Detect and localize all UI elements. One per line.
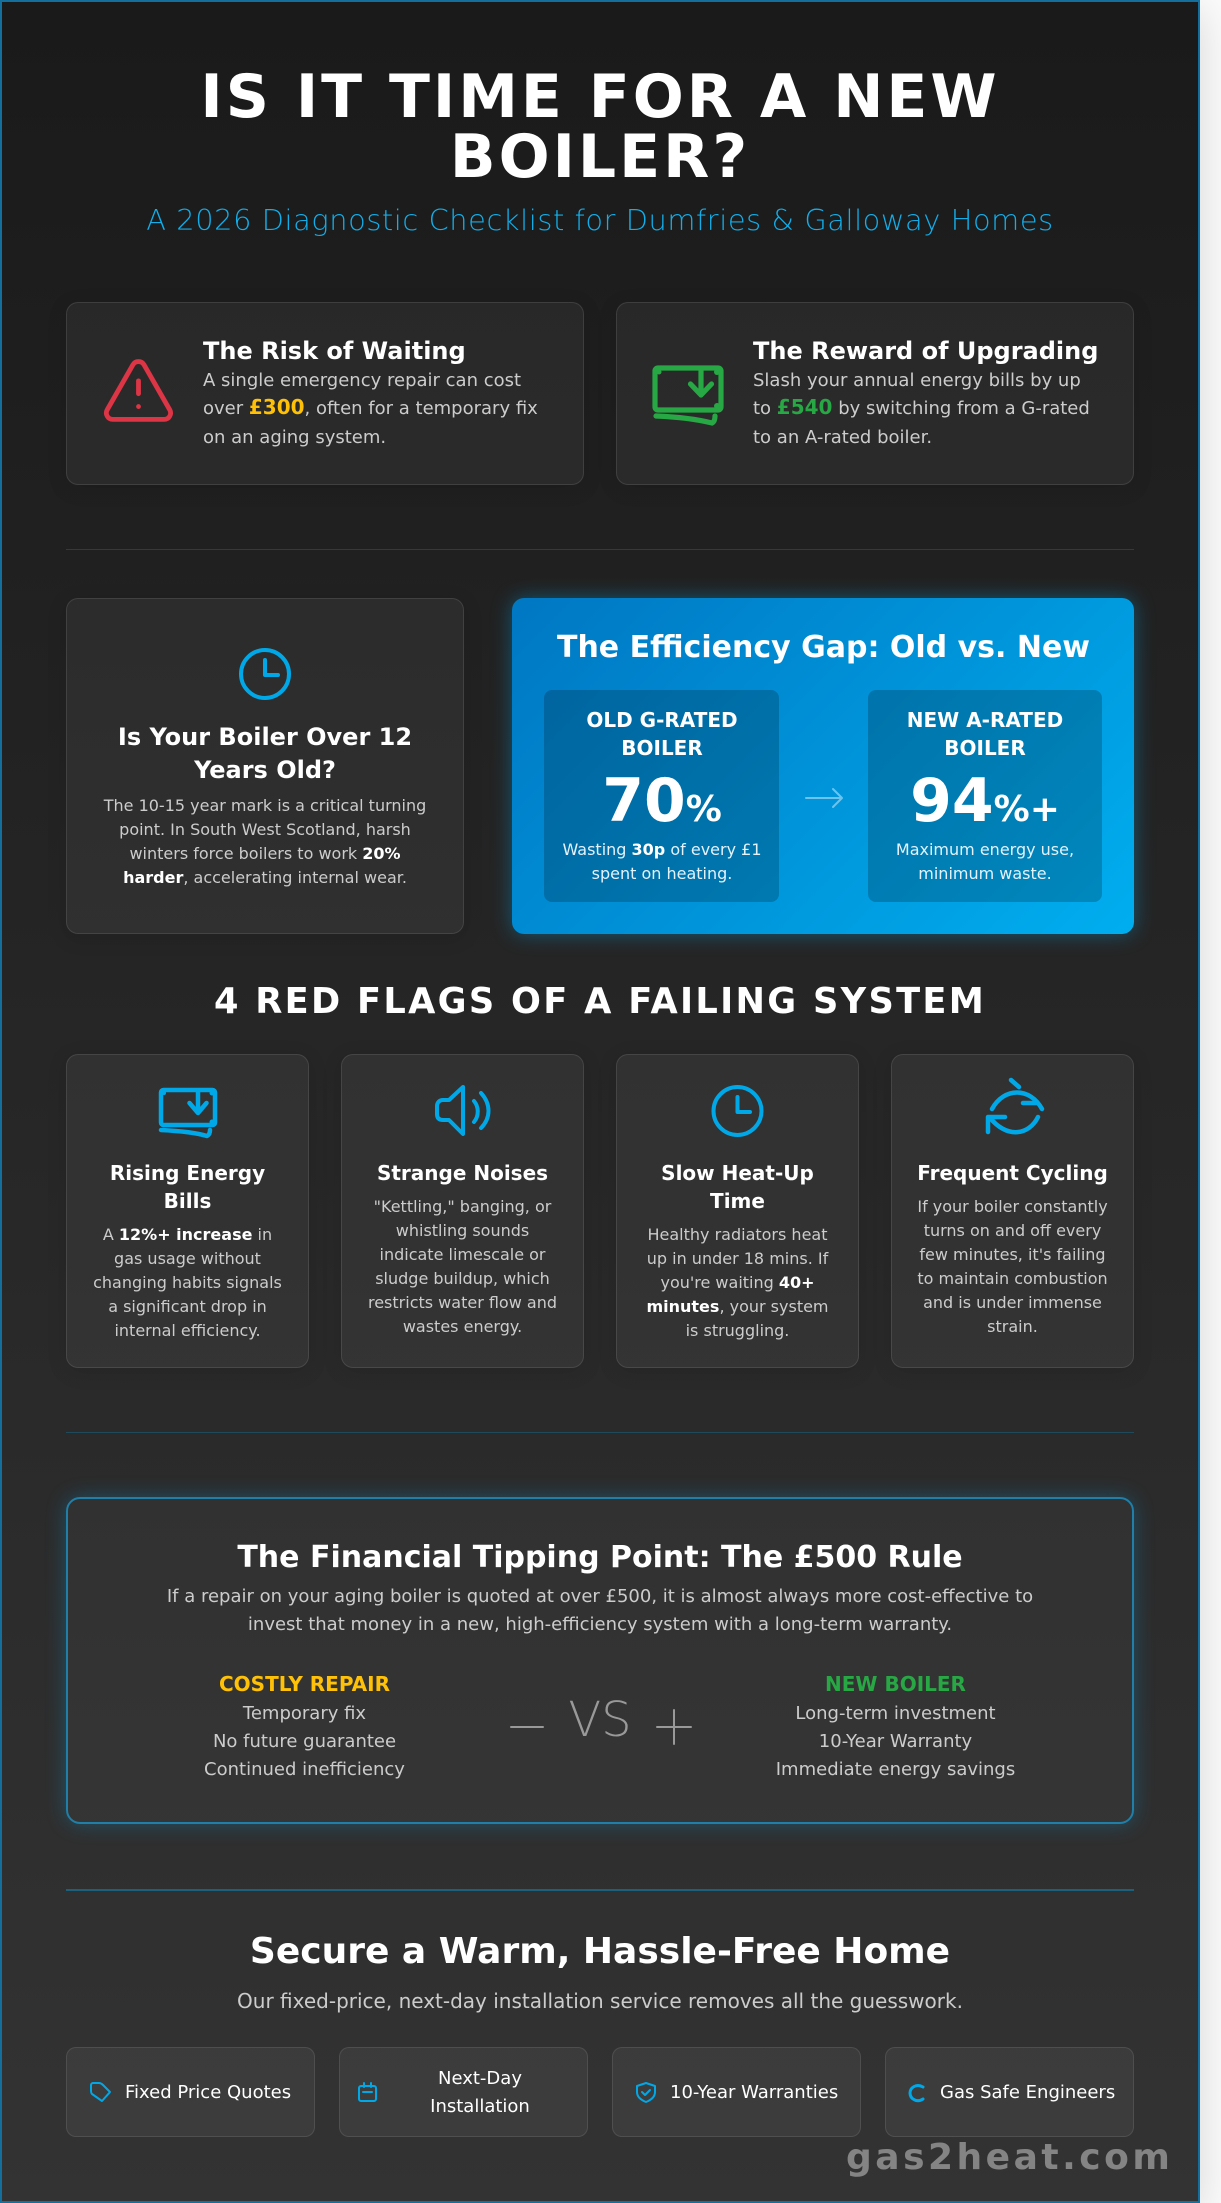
- label: new boiler: [907, 708, 1063, 760]
- label: old boiler: BOILER: [621, 736, 703, 760]
- heading: slow heat-up: Slow Heat-Up: [661, 1161, 814, 1185]
- text: rising energy bills: [93, 1225, 282, 1340]
- text: financial tipping point: [167, 1586, 1033, 1635]
- text: frequent cycling: [917, 1197, 1108, 1336]
- heading: risk of waiting: The Risk of Waiting: [203, 336, 466, 364]
- heading: slow heat-up: Time: [710, 1189, 765, 1213]
- heading: call to action: Secure a Warm, Hassle-Free Home: [250, 1931, 950, 1972]
- text: reward of upgrading: to £540 by switching from a G-rated: [753, 395, 1090, 419]
- text: rising energy bills: a significant drop in: [108, 1297, 267, 1316]
- column: costly repair: Continued inefficiency: [204, 1759, 405, 1780]
- text: rising energy bills: gas usage without: [114, 1249, 261, 1268]
- heading: slow heat-up: [661, 1161, 814, 1213]
- column: costly repair: [204, 1672, 405, 1780]
- heading: red flags: 4 RED FLAGS OF A FAILING SYSTEM: [214, 981, 986, 1022]
- title: BOILER?: [450, 122, 750, 192]
- text: strange noises: indicate limescale or: [380, 1245, 546, 1264]
- panel: new boiler: [868, 690, 1102, 902]
- text: new boiler: [896, 840, 1074, 883]
- icon: price tag: [90, 2082, 111, 2102]
- column: new boiler: NEW BOILER: [825, 1672, 966, 1696]
- heading: boiler age: [118, 723, 412, 784]
- text: boiler age: winters force boilers to work 20%: [129, 844, 401, 863]
- text: rising energy bills: internal efficiency.: [114, 1321, 261, 1340]
- text: new boiler: minimum waste.: [918, 864, 1052, 883]
- text: boiler age: The 10-15 year mark is a critical turning: [104, 796, 426, 815]
- text: slow heat-up: up in under 18 mins. If: [647, 1249, 828, 1268]
- icon: cycling arrows: [986, 1078, 1044, 1134]
- label: next-day installation: Installation: [430, 2096, 530, 2117]
- heading: financial tipping point: The Financial Tipping Point: The £500 Rule: [237, 1540, 963, 1574]
- icon: money saving small: [158, 1088, 218, 1138]
- column: new boiler: [776, 1672, 1015, 1780]
- versus divider: [510, 1692, 692, 1748]
- column: new boiler: 10-Year Warranty: [819, 1731, 972, 1752]
- icon: speaker: [435, 1085, 490, 1136]
- heading: boiler age: Is Your Boiler Over 12: [118, 723, 412, 751]
- icon: calendar: [358, 2082, 377, 2102]
- icon: shield check: [636, 2082, 656, 2103]
- text: reward of upgrading: Slash your annual energy bills by up: [753, 370, 1081, 391]
- icon: clock: [239, 648, 291, 700]
- text: strange noises: sludge buildup, which: [375, 1269, 550, 1288]
- versus divider: VS: [568, 1692, 632, 1748]
- column: new boiler: Immediate energy savings: [776, 1759, 1015, 1780]
- column: costly repair: Temporary fix: [243, 1703, 366, 1724]
- column: costly repair: No future guarantee: [213, 1731, 396, 1752]
- heading: rising energy bills: [110, 1161, 265, 1213]
- text: strange noises: wastes energy.: [403, 1317, 522, 1336]
- label: old boiler: [586, 708, 738, 760]
- column: new boiler: Long-term investment: [795, 1703, 996, 1724]
- text: boiler age: [104, 796, 426, 887]
- panel: financial tipping point: [66, 1497, 1134, 1824]
- icon: money saving: [652, 365, 724, 426]
- text: old boiler: Wasting 30p of every £1: [562, 840, 762, 859]
- text: rising energy bills: A 12%+ increase in: [103, 1225, 272, 1244]
- panel: slow heat-up: [616, 1054, 859, 1368]
- text: rising energy bills: changing habits signals: [93, 1273, 282, 1292]
- panel: rising energy bills: [66, 1054, 309, 1368]
- label: next-day installation: Next-Day: [438, 2068, 522, 2088]
- label: old boiler: OLD G-RATED: [586, 708, 738, 732]
- panel: boiler age: [66, 598, 464, 934]
- title: IS IT TIME FOR A NEW: [200, 62, 1000, 132]
- text: boiler age: point. In South West Scotland, harsh: [119, 820, 411, 839]
- heading: frequent cycling: Frequent Cycling: [917, 1161, 1108, 1185]
- text: reward of upgrading: to an A-rated boiler.: [753, 427, 932, 448]
- label: gas safe engineers: Gas Safe Engineers: [940, 2082, 1115, 2102]
- badge: fixed price quotes: [66, 2047, 315, 2137]
- text: frequent cycling: to maintain combustion: [917, 1269, 1108, 1288]
- badge: next-day installation: [339, 2047, 588, 2137]
- label: new boiler: NEW A-RATED: [907, 708, 1063, 732]
- text: boiler age: harder, accelerating internal wear.: [123, 868, 407, 887]
- text: slow heat-up: you're waiting 40+: [660, 1273, 815, 1292]
- label: 10-year warranties: 10-Year Warranties: [670, 2082, 838, 2102]
- text: slow heat-up: [646, 1225, 829, 1340]
- stat: 70 percent: 70%: [602, 766, 722, 836]
- panel: reward of upgrading: [616, 302, 1134, 485]
- icon: clock small: [712, 1085, 764, 1137]
- text: risk of waiting: [203, 370, 538, 448]
- text: slow heat-up: minutes, your system: [646, 1297, 829, 1316]
- label: fixed price quotes: Fixed Price Quotes: [125, 2082, 291, 2102]
- title: [200, 62, 1000, 192]
- text: risk of waiting: A single emergency repair can cost: [203, 370, 521, 391]
- text: financial tipping point: invest that money in a new, high-efficiency system with a long-term warranty.: [248, 1614, 952, 1635]
- label: new boiler: BOILER: [944, 736, 1026, 760]
- text: frequent cycling: If your boiler constantly: [917, 1197, 1108, 1216]
- heading: boiler age: Years Old?: [194, 756, 336, 784]
- text: frequent cycling: strain.: [987, 1317, 1038, 1336]
- label: next-day installation: [430, 2068, 530, 2117]
- panel: frequent cycling: [891, 1054, 1134, 1368]
- panel: old boiler: [544, 690, 779, 902]
- panel: efficiency gap: [512, 598, 1134, 934]
- text: frequent cycling: turns on and off every: [924, 1221, 1101, 1240]
- text: risk of waiting: on an aging system.: [203, 427, 386, 448]
- text: old boiler: spent on heating.: [592, 864, 732, 883]
- stat: 94 percent: 94%+: [910, 766, 1060, 836]
- heading: strange noises: Strange Noises: [377, 1161, 548, 1185]
- text: frequent cycling: and is under immense: [923, 1293, 1102, 1312]
- heading: rising energy bills: Rising Energy: [110, 1161, 265, 1185]
- icon: warning triangle: [104, 359, 174, 422]
- panel: risk of waiting: [66, 302, 584, 485]
- text: slow heat-up: Healthy radiators heat: [647, 1225, 828, 1244]
- heading: rising energy bills: Bills: [164, 1189, 211, 1213]
- badge: 10-year warranties: [612, 2047, 861, 2137]
- text: frequent cycling: few minutes, it's failing: [919, 1245, 1106, 1264]
- text: strange noises: [368, 1197, 557, 1336]
- text: old boiler: [562, 840, 762, 883]
- text: strange noises: whistling sounds: [396, 1221, 529, 1240]
- text: risk of waiting: over £300, often for a temporary fix: [203, 395, 538, 419]
- text: strange noises: restricts water flow and: [368, 1293, 557, 1312]
- watermark: gas2heat.com: [846, 2137, 1173, 2178]
- text: strange noises: "Kettling," banging, or: [374, 1197, 551, 1216]
- text: call to action: Our fixed-price, next-day installation service removes all the guesswork.: [237, 1989, 963, 2013]
- icon: gas safe: [908, 2084, 924, 2102]
- heading: efficiency gap: The Efficiency Gap: Old vs. New: [557, 630, 1090, 665]
- heading: reward of upgrading: The Reward of Upgrading: [753, 336, 1098, 364]
- subtitle: A 2026 Diagnostic Checklist for Dumfries & Galloway Homes: [146, 202, 1054, 236]
- column: costly repair: COSTLY REPAIR: [219, 1672, 390, 1696]
- text: slow heat-up: is struggling.: [686, 1321, 789, 1340]
- arrow: [805, 788, 843, 808]
- text: new boiler: Maximum energy use,: [896, 840, 1074, 859]
- text: financial tipping point: If a repair on your aging boiler is quoted at over £500, it is almost always more cost-effective to: [167, 1586, 1033, 1606]
- badge: gas safe engineers: [885, 2047, 1134, 2137]
- panel: strange noises: [341, 1054, 584, 1368]
- text: reward of upgrading: [753, 370, 1090, 448]
